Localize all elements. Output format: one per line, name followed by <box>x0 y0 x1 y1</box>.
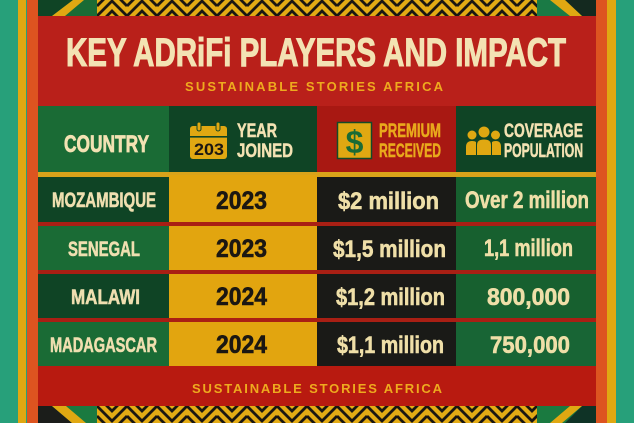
header: premium received: RECEIVED <box>379 141 441 162</box>
row: Malawi <box>38 274 596 318</box>
footer banner <box>38 366 596 406</box>
icon: calendar: 203 <box>194 140 224 159</box>
subtitle: SUSTAINABLE STORIES AFRICA <box>185 79 444 94</box>
header: year joined: JOINED <box>237 141 293 162</box>
header: premium received: PREMIUM <box>379 121 441 142</box>
row: Madagascar: 2024 <box>216 331 267 359</box>
row: Senegal: SENEGAL <box>68 238 140 261</box>
header: year joined <box>237 121 293 162</box>
icon: dollar box: $ <box>346 124 364 160</box>
row: Senegal: 2023 <box>216 235 267 263</box>
row: Malawi: $1,2 million <box>336 284 445 311</box>
row: Senegal <box>38 226 596 270</box>
title banner <box>38 16 596 106</box>
icon: dollar box <box>338 122 372 160</box>
top pattern band <box>38 0 596 16</box>
table body <box>38 175 596 366</box>
row: Madagascar: $1,1 million <box>337 332 444 359</box>
header: premium received <box>379 121 441 162</box>
header: coverage population: POPULATION <box>504 141 583 162</box>
row: Mozambique: MOZAMBIQUE <box>52 189 156 212</box>
bottom pattern band <box>38 406 596 423</box>
row: Mozambique: Over 2 million <box>465 187 589 214</box>
icon: calendar <box>190 122 227 159</box>
icon: people <box>466 126 501 155</box>
row: Malawi: 2024 <box>216 283 267 311</box>
row: Mozambique: $2 million <box>338 188 439 215</box>
row: Madagascar: MADAGASCAR <box>50 334 157 357</box>
header: coverage population: COVERAGE <box>504 121 583 142</box>
row: Madagascar <box>38 322 596 366</box>
row: Malawi: 800,000 <box>487 284 570 311</box>
header: coverage population <box>504 121 583 162</box>
footer text: SUSTAINABLE STORIES AFRICA <box>192 381 443 396</box>
row: Madagascar: 750,000 <box>490 332 570 359</box>
header: year joined: YEAR <box>237 121 277 142</box>
table header row <box>38 106 596 177</box>
row: Mozambique <box>38 175 596 222</box>
row: Senegal: $1,5 million <box>333 236 446 263</box>
row: Mozambique: 2023 <box>216 187 267 215</box>
row: Malawi: MALAWI <box>71 286 140 309</box>
header: country: COUNTRY <box>64 131 149 158</box>
row: Senegal: 1,1 million <box>484 235 573 262</box>
